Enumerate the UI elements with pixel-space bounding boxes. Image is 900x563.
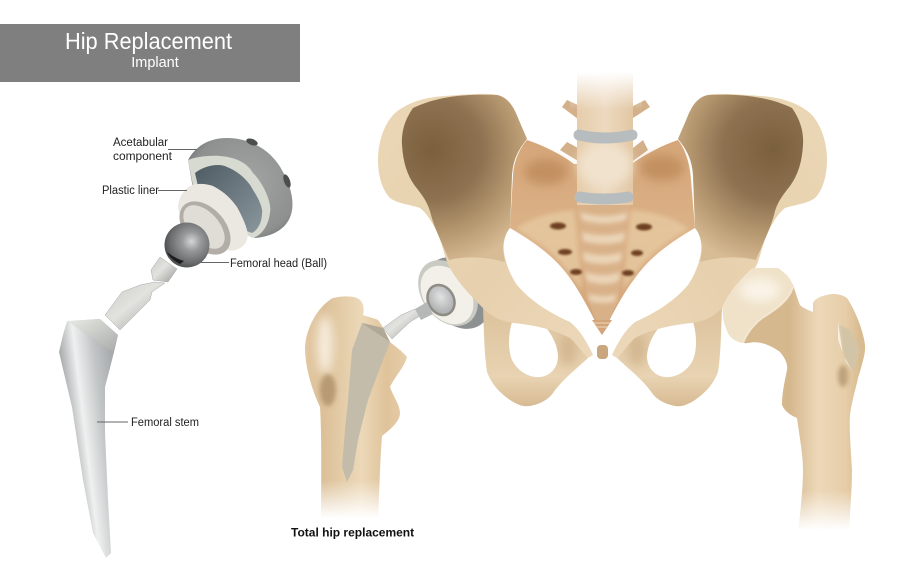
right pelvic half [612,94,827,406]
left pelvic half [378,94,593,406]
implant: femoral stem [59,319,118,558]
label: acetabular component: component [113,151,173,163]
intervertebral discs [579,135,632,199]
implanted cup [406,244,504,342]
caption: Total hip replacement [291,526,414,540]
label: femoral stem [97,417,199,429]
pubic symphysis [597,345,608,359]
spine column [577,68,633,205]
left femur with implant [300,244,504,528]
implanted stem [342,323,390,482]
pelvis illustration [378,66,827,406]
sacral foramina [550,222,652,276]
spine transverse processes [560,100,650,161]
label: acetabular component: Acetabular [113,137,168,149]
title banner: Implant [131,55,179,71]
implant: neck [105,257,177,330]
implant: plastic liner [169,184,248,264]
sacral tip [592,320,612,335]
title banner: Hip Replacement [65,28,233,54]
label: plastic liner: Plastic liner [102,185,159,197]
implant: femoral head [164,222,210,268]
implanted neck [383,309,420,339]
sacral shading [516,155,689,290]
femoral head [723,268,793,343]
right femur [723,268,865,534]
label: acetabular component [113,137,197,163]
sacral vertebrae [577,203,630,335]
label: plastic liner [102,185,187,197]
title banner [0,24,300,82]
label: femoral head: Femoral head (Ball) [230,258,327,270]
sacral ridges [580,212,628,303]
sacrum [510,140,695,335]
label: femoral stem: Femoral stem [131,417,199,429]
implant: acetabular cup [188,137,292,238]
greater trochanter [840,325,860,372]
